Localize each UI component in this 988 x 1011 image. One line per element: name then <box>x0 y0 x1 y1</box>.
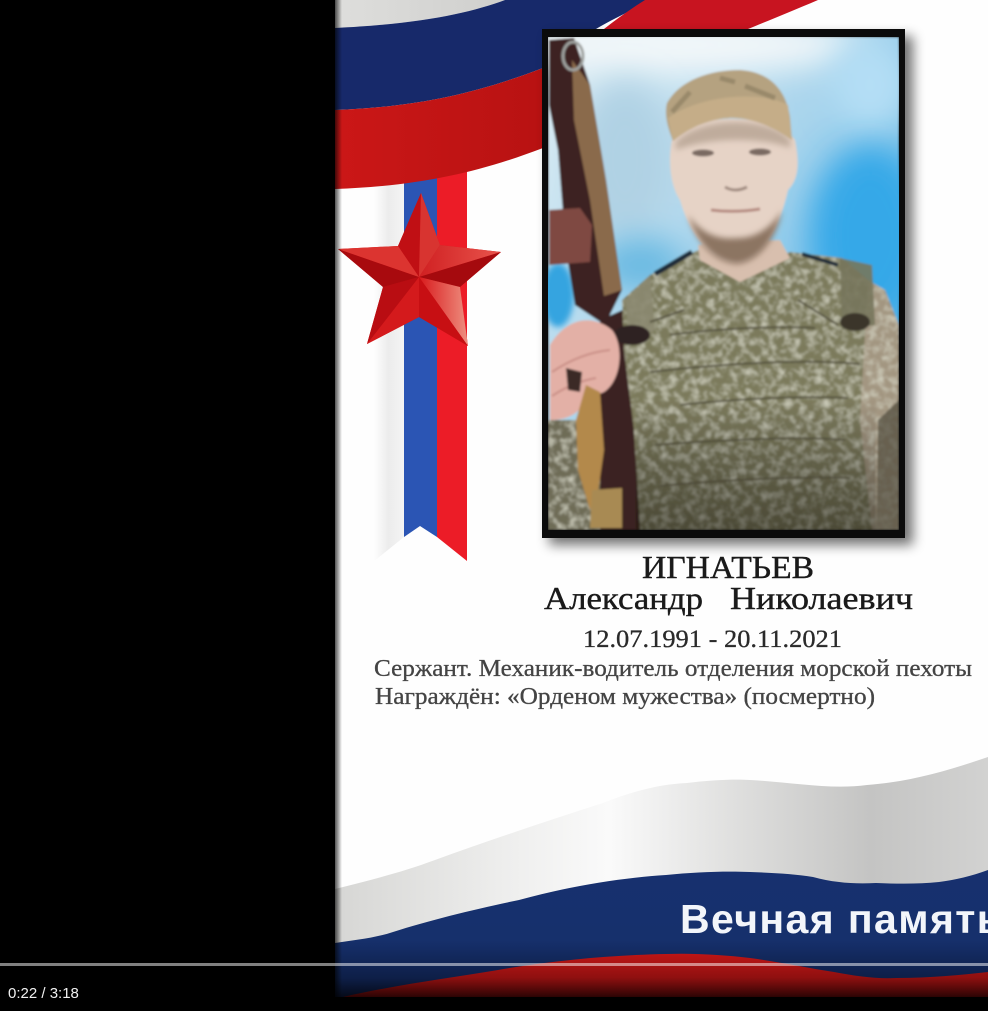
dark pouch <box>840 313 870 331</box>
vest straps <box>626 277 656 332</box>
neck <box>698 240 790 282</box>
right sleeve <box>860 280 899 530</box>
name and service text <box>374 549 972 710</box>
epaulette dark trim <box>655 252 692 274</box>
mouth <box>711 209 760 211</box>
vest molle lines <box>650 300 860 486</box>
top flag wave <box>335 0 818 189</box>
bottom white band <box>335 757 988 960</box>
cap camo marks <box>672 78 775 112</box>
rifle strap <box>549 38 622 325</box>
nose <box>725 187 747 190</box>
dates: 12.07.1991 - 20.11.2021 <box>583 626 842 653</box>
rank and role: Сержант. Механик-водитель отделения морской пехоты <box>374 656 972 682</box>
top red band <box>335 68 543 189</box>
first name: Александр <box>544 580 703 616</box>
eyes <box>692 150 714 156</box>
player time code: 0:22 / 3:18 <box>8 985 79 1002</box>
photo frame shadow <box>549 36 913 545</box>
award: Награждён: «Орденом мужества» (посмертно) <box>375 684 875 710</box>
top blue band <box>335 0 650 110</box>
tan strap tail <box>576 385 604 510</box>
panel left edge shadow <box>328 0 342 1011</box>
vest lower shading <box>636 400 876 530</box>
sky <box>548 37 899 422</box>
rifle handguard <box>549 208 592 265</box>
cap <box>666 70 792 141</box>
dark buckle <box>614 325 650 345</box>
beard <box>688 210 782 264</box>
black frame <box>542 29 905 538</box>
hand <box>550 320 620 420</box>
dark jacket between hand and vest <box>598 309 642 530</box>
poster panel <box>335 0 988 997</box>
portrait <box>548 37 899 530</box>
ribbon red stripe <box>437 165 467 561</box>
portrait photo with black frame <box>542 29 905 538</box>
bottom red band <box>343 954 988 997</box>
ribbon <box>373 165 467 562</box>
icon: red star <box>338 193 501 346</box>
top right red sliver <box>604 0 818 29</box>
shoulders and plate carrier <box>622 250 899 530</box>
bottom flag wave <box>335 757 988 997</box>
top white band <box>335 0 505 28</box>
surname: ИГНАТЬЕВ <box>642 549 814 585</box>
face <box>670 119 798 263</box>
bottom blue band <box>335 870 988 997</box>
ribbon blue stripe <box>404 170 437 537</box>
ribbon white stripe <box>373 180 404 562</box>
rifle sling ring <box>563 42 583 70</box>
patronymic: Николаевич <box>730 580 913 616</box>
visor shadow on forehead <box>676 122 790 150</box>
lower left sleeve <box>548 418 602 530</box>
player progress bar <box>0 963 988 966</box>
